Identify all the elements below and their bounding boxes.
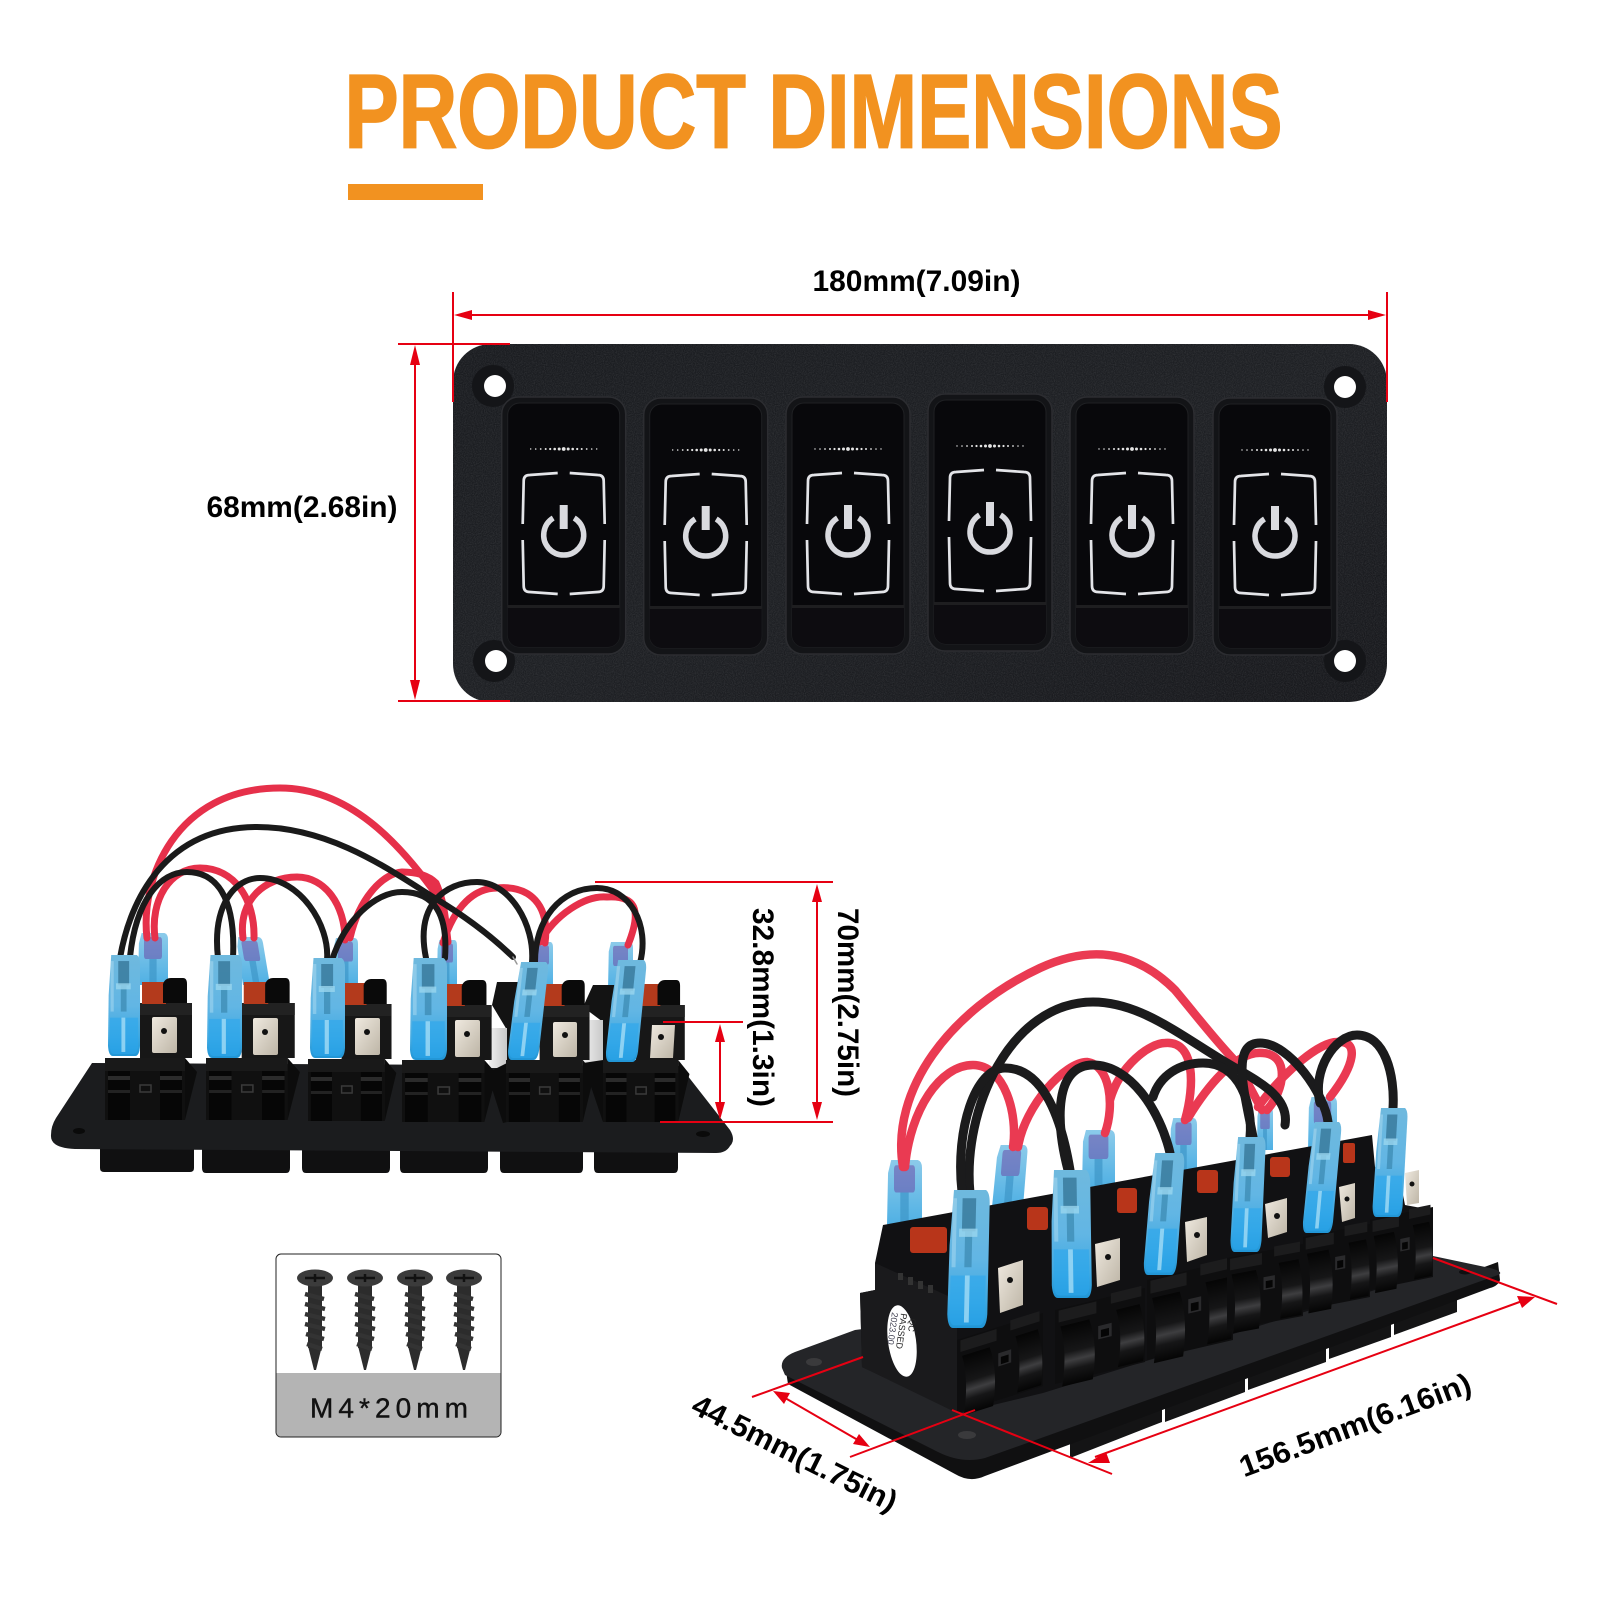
front terminals left view (108, 955, 647, 1062)
black wires left view (120, 827, 643, 964)
height label: 68mm(2.68in) (206, 491, 398, 524)
rocker switch 1 (502, 397, 626, 654)
switch bodies left view (105, 978, 689, 1122)
rocker switch 2 (644, 398, 768, 655)
angled view dimension: 156.5mm (952, 1258, 1557, 1484)
switch faces angled view (957, 1204, 1433, 1417)
underside blocks (100, 1145, 678, 1173)
box grey band (276, 1373, 500, 1436)
label 156.5mm: 156.5mm(6.16in) (1235, 1367, 1476, 1484)
width dimension: 180mm (452, 265, 1388, 402)
height dimension: 68mm (206, 343, 510, 702)
metal blades left view (152, 1017, 675, 1058)
mounting holes (472, 365, 1366, 682)
arrow 44.5mm (752, 1357, 975, 1457)
dimension arrows (595, 881, 833, 1123)
width label: 180mm(7.09in) (812, 265, 1020, 298)
red rocker tabs (910, 1143, 1355, 1253)
angled view dimension: 44.5mm (686, 1357, 975, 1519)
plate holes (806, 1270, 1471, 1439)
label 32.8mm: 32.8mm(1.3in) (746, 908, 779, 1107)
screw icons (297, 1270, 482, 1370)
panel: front view of switch panel (453, 344, 1387, 702)
box white area (276, 1254, 501, 1437)
metal blades angled view (998, 1170, 1419, 1313)
switch block body (860, 1135, 1433, 1413)
underside blocks (1070, 1295, 1457, 1458)
rocker switch 3 (786, 397, 910, 654)
width arrow (452, 292, 1388, 402)
rocker switch 6 (1213, 398, 1337, 655)
side panels of switches 5 and 6 (487, 982, 625, 1123)
screws box (276, 1254, 501, 1437)
title: PRODUCT DIMENSIONS (344, 54, 1282, 170)
title underline bar (348, 184, 483, 200)
sticker: PASSED (894, 1313, 909, 1350)
back terminals angled view (887, 1097, 1337, 1225)
arrow 156.5mm (952, 1258, 1557, 1474)
label 44.5mm: 44.5mm(1.75in) (686, 1389, 902, 1519)
back terminals left view (138, 933, 633, 990)
front terminals angled view (947, 1108, 1408, 1328)
product photo: rear side view (51, 788, 733, 1173)
vent notches (898, 1273, 933, 1293)
sticker: 2023.00 (885, 1312, 900, 1345)
rocker switch 4 (928, 394, 1052, 651)
black wires angled view (961, 1002, 1393, 1193)
rocker switch 5 (1070, 397, 1194, 654)
metal plate (453, 344, 1387, 702)
plate texture (453, 344, 1387, 702)
plate holes (73, 1128, 710, 1137)
height dimensions of side view (595, 881, 864, 1123)
height arrow (398, 343, 510, 702)
body side panel (860, 1263, 957, 1413)
red wires left view (146, 788, 635, 945)
plate surface (782, 1256, 1500, 1460)
plate edge (785, 1262, 1500, 1479)
mounting plate (51, 1063, 733, 1153)
screw size label: M4*20mm (310, 1392, 468, 1424)
sticker (883, 1303, 921, 1379)
label 70mm: 70mm(2.75in) (831, 908, 864, 1097)
sticker: QC (906, 1318, 918, 1333)
product photo: angled view (782, 954, 1500, 1479)
red wires angled view (901, 954, 1352, 1167)
